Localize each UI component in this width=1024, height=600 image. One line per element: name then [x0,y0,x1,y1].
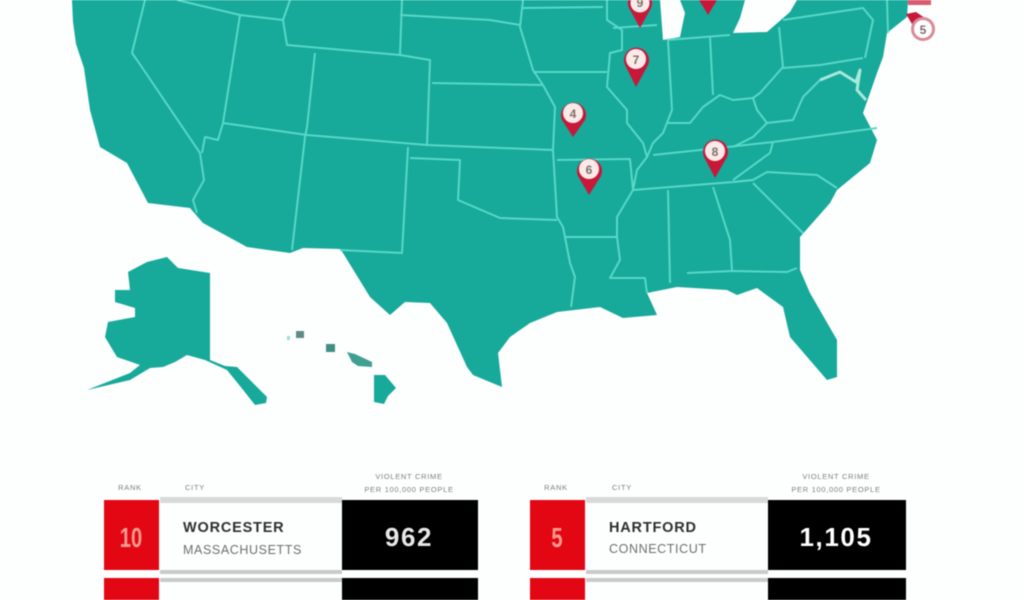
column headers: VIOLENT CRIME [802,472,870,481]
column headers: RANK [544,483,568,492]
row: Worcester: 962 [385,522,433,552]
column headers [118,472,454,494]
column headers: PER 100,000 PEOPLE [791,485,881,494]
row: Worcester: WORCESTER [183,520,284,536]
row: Hartford: CONNECTICUT [609,542,707,556]
row: Worcester: MASSACHUSETTS [183,543,302,557]
table: left column [104,472,478,600]
row: Hartford: 5 [551,523,563,554]
column headers: RANK [118,483,142,492]
pin: rank 6: 6 [586,163,593,177]
column headers: PER 100,000 PEOPLE [364,485,454,494]
Hawaii [287,331,396,404]
pin: rank 8 [703,140,728,178]
Alaska [87,257,267,405]
table: right column [530,472,906,600]
row: Worcester: 10 [120,523,142,554]
row: Hartford: 1,105 [799,522,873,552]
row: Hartford: HARTFORD [609,520,697,536]
column headers [544,472,881,494]
map of the United States [72,0,908,405]
northeast callout pins [906,0,934,40]
pin: rank 7 [624,48,649,87]
row: rank 4 [530,578,906,600]
pin: rank 8: 8 [712,145,719,159]
pin: rank 6 [577,159,602,195]
state borders [132,0,888,307]
column headers: CITY [612,483,632,492]
row: Hartford [530,497,906,574]
pin: rank 1 [699,0,717,15]
row: rank 9 [104,578,478,600]
pin: rank 4 [561,103,586,137]
mainland states [72,0,908,387]
northeast callout pins: 5 [920,23,927,37]
pin: rank 9 [628,0,652,28]
column headers: VIOLENT CRIME [375,472,443,481]
pin: rank 4: 4 [570,107,577,121]
pin: rank 7: 7 [633,53,640,67]
row: Worcester [104,497,478,574]
column headers: CITY [185,483,205,492]
